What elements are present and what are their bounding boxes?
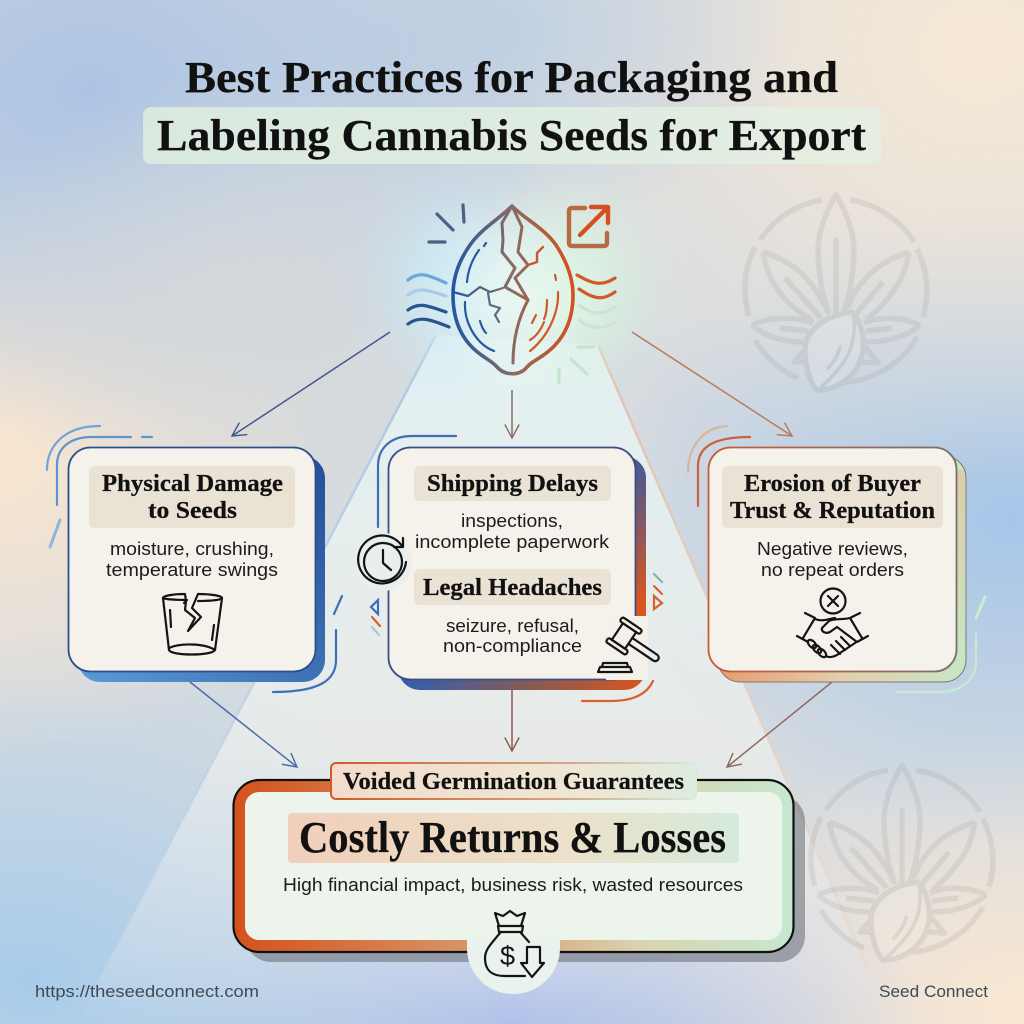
title: Best Practices for Packaging and bbox=[185, 53, 838, 102]
icon: money bag bbox=[467, 911, 560, 994]
title: Labeling Cannabis Seeds for Export bbox=[157, 111, 866, 160]
panel: shipping delays and legal headaches: incomplete paperwork bbox=[415, 532, 610, 552]
arrow: seed to shipping delays bbox=[511, 390, 513, 438]
footer url: https://theseedconnect.com bbox=[35, 982, 259, 1001]
panel: buyer trust: Erosion of Buyer bbox=[744, 471, 921, 497]
title bbox=[143, 53, 881, 164]
box shadow bbox=[245, 795, 805, 962]
pill: voided guarantees bbox=[331, 763, 696, 799]
watermark leaf top right bbox=[745, 195, 927, 390]
icon: handshake with cross bbox=[797, 588, 868, 659]
heading label: shipping delays bbox=[414, 466, 611, 501]
panel: buyer trust: Trust & Reputation bbox=[730, 498, 935, 524]
panel: physical damage: to Seeds bbox=[148, 498, 237, 524]
arrow: seed to physical damage bbox=[232, 332, 390, 436]
panel: buyer trust: no repeat orders bbox=[761, 560, 904, 580]
box frame bbox=[234, 780, 794, 952]
heading label bbox=[288, 813, 739, 863]
card depth bbox=[718, 456, 966, 682]
seed glow bbox=[398, 203, 632, 370]
heading label bbox=[89, 466, 295, 528]
card depth bbox=[398, 456, 646, 690]
panel: physical damage: Physical Damage bbox=[102, 471, 283, 497]
card face bbox=[708, 448, 956, 672]
heading label bbox=[722, 466, 943, 528]
arrow: shipping to losses bbox=[511, 690, 513, 751]
panel: costly returns bbox=[234, 763, 805, 994]
panel: physical damage bbox=[68, 448, 325, 682]
box face bbox=[245, 792, 782, 940]
icon: export arrow bbox=[569, 207, 608, 246]
decorative accents: physical damage bbox=[47, 426, 342, 692]
decorative accents: shipping delays bbox=[371, 436, 662, 701]
arrow: trust to losses bbox=[727, 682, 832, 767]
footer brand: Seed Connect bbox=[879, 982, 988, 1001]
arrow: seed to buyer trust bbox=[632, 332, 792, 436]
panel: buyer trust: Negative reviews, bbox=[757, 539, 908, 559]
panel: physical damage: moisture, crushing, bbox=[110, 539, 274, 559]
icon: clock bbox=[354, 533, 412, 591]
watermark leaf bottom right bbox=[811, 765, 993, 960]
title highlight bbox=[143, 107, 881, 164]
icon: money bag: $ bbox=[500, 941, 515, 971]
panel: shipping delays and legal headaches: Legal Headaches bbox=[423, 575, 602, 601]
panel: buyer trust bbox=[708, 448, 966, 682]
panel: physical damage: temperature swings bbox=[106, 560, 278, 580]
card depth bbox=[78, 456, 325, 682]
icon: broken container bbox=[163, 594, 222, 654]
decorative accents: buyer trust bbox=[688, 426, 985, 692]
light beam triangle bbox=[76, 335, 891, 1024]
icon: gavel bbox=[590, 616, 667, 680]
panel: shipping delays and legal headaches: Shipping Delays bbox=[427, 471, 598, 497]
icon: cracked seed bbox=[453, 206, 573, 374]
arrow: physical damage to losses bbox=[190, 682, 297, 767]
icon: seed radiating marks and waves bbox=[408, 205, 615, 383]
panel: costly returns: Costly Returns & Losses bbox=[299, 813, 726, 862]
card face bbox=[388, 448, 636, 680]
panel: costly returns: High financial impact, business risk, wasted resources bbox=[283, 875, 743, 895]
panel: shipping delays and legal headaches: non-compliance bbox=[443, 636, 582, 656]
pill: voided guarantees: Voided Germination Guarantees bbox=[343, 769, 684, 795]
panel: shipping delays and legal headaches: inspections, bbox=[461, 511, 563, 531]
card face bbox=[68, 448, 316, 672]
panel: shipping delays and legal headaches: seizure, refusal, bbox=[446, 616, 579, 636]
heading label: legal headaches bbox=[414, 569, 611, 605]
panel: shipping delays and legal headaches bbox=[354, 448, 667, 690]
